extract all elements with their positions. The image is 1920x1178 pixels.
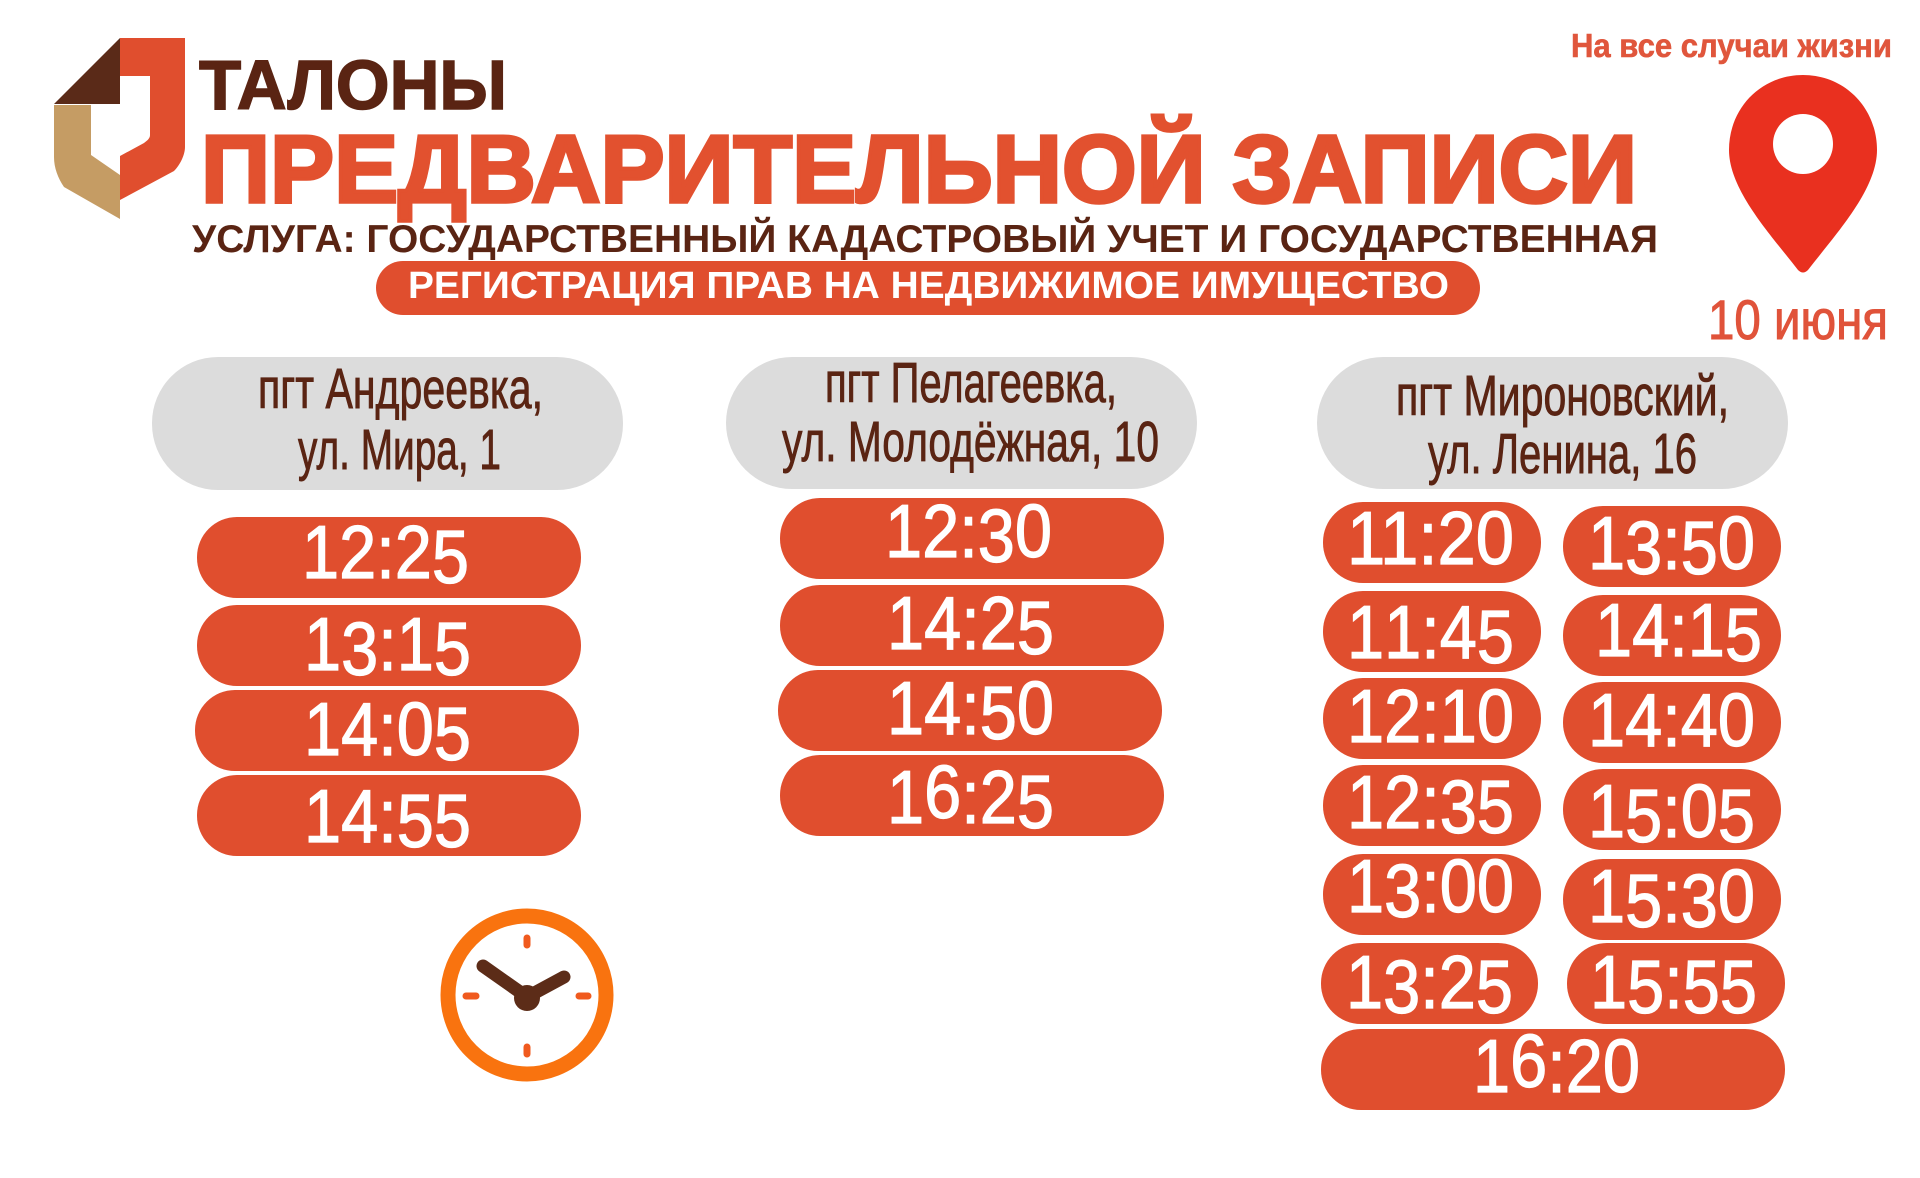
time 14:50 <box>778 666 1162 755</box>
time 12:10: 12:10 <box>1347 674 1514 758</box>
time 12:25 <box>197 510 581 599</box>
time 11:45: 11:45 <box>1347 590 1514 679</box>
address pill: ул. Мира, 1 <box>298 418 501 482</box>
time 16:20 <box>1321 1019 1785 1110</box>
time 14:40: 14:40 <box>1588 678 1755 762</box>
time 15:05: 15:05 <box>1588 769 1755 858</box>
date: 10 июня <box>1708 288 1888 351</box>
panel: Пелагеевка <box>726 351 1197 844</box>
panel: Андреевка <box>152 357 623 863</box>
address pill: пгт Андреевка, <box>258 357 543 421</box>
time 16:25: 16:25 <box>887 750 1054 844</box>
icon: location pin <box>1729 75 1877 272</box>
time 13:50: 13:50 <box>1588 501 1755 590</box>
time 15:30: 15:30 <box>1588 854 1755 943</box>
time 14:15: 14:15 <box>1595 588 1762 677</box>
time 13:15: 13:15 <box>304 602 471 691</box>
time 14:05: 14:05 <box>304 687 471 776</box>
address pill: ул. Ленина, 16 <box>1428 422 1697 486</box>
heading: предварительной записи: ПРЕДВАРИТЕЛЬНОЙ ЗАПИСИ <box>201 114 1637 223</box>
logo <box>54 38 185 219</box>
address pill <box>152 357 623 490</box>
time 14:05 <box>195 687 579 776</box>
service pill: РЕГИСТРАЦИЯ ПРАВ НА НЕДВИЖИМОЕ ИМУЩЕСТВО <box>408 265 1449 307</box>
time 16:20: 16:20 <box>1473 1019 1640 1108</box>
time 12:35: 12:35 <box>1347 760 1514 849</box>
address pill: пгт Пелагеевка, <box>825 351 1117 415</box>
time 14:55 <box>197 774 581 863</box>
time 13:00: 13:00 <box>1347 844 1514 933</box>
time 15:55: 15:55 <box>1590 940 1757 1029</box>
time 11:20: 11:20 <box>1347 496 1514 580</box>
address pill <box>726 351 1197 489</box>
panel: Мироновский <box>1317 357 1788 1110</box>
time 13:25: 13:25 <box>1346 940 1513 1029</box>
address pill <box>1317 357 1788 489</box>
slogan: На все случаи жизни <box>1571 27 1892 64</box>
time 12:25: 12:25 <box>302 510 469 599</box>
time 14:25: 14:25 <box>887 581 1054 670</box>
time 14:25 <box>780 581 1164 670</box>
service line: УСЛУГА: ГОСУДАРСТВЕННЫЙ КАДАСТРОВЫЙ УЧЕТ И ГОСУДАРСТВЕННАЯ <box>192 216 1658 261</box>
icon: clock <box>448 916 606 1074</box>
time 14:55: 14:55 <box>304 774 471 863</box>
time 12:30: 12:30 <box>885 489 1052 578</box>
address pill: ул. Молодёжная, 10 <box>782 410 1159 474</box>
heading: талоны: ТАЛОНЫ <box>199 46 507 124</box>
time 14:50: 14:50 <box>887 666 1054 755</box>
time 16:25 <box>780 750 1164 844</box>
time 12:30 <box>780 489 1164 579</box>
address pill: пгт Мироновский, <box>1396 364 1729 428</box>
time 13:15 <box>197 602 581 691</box>
